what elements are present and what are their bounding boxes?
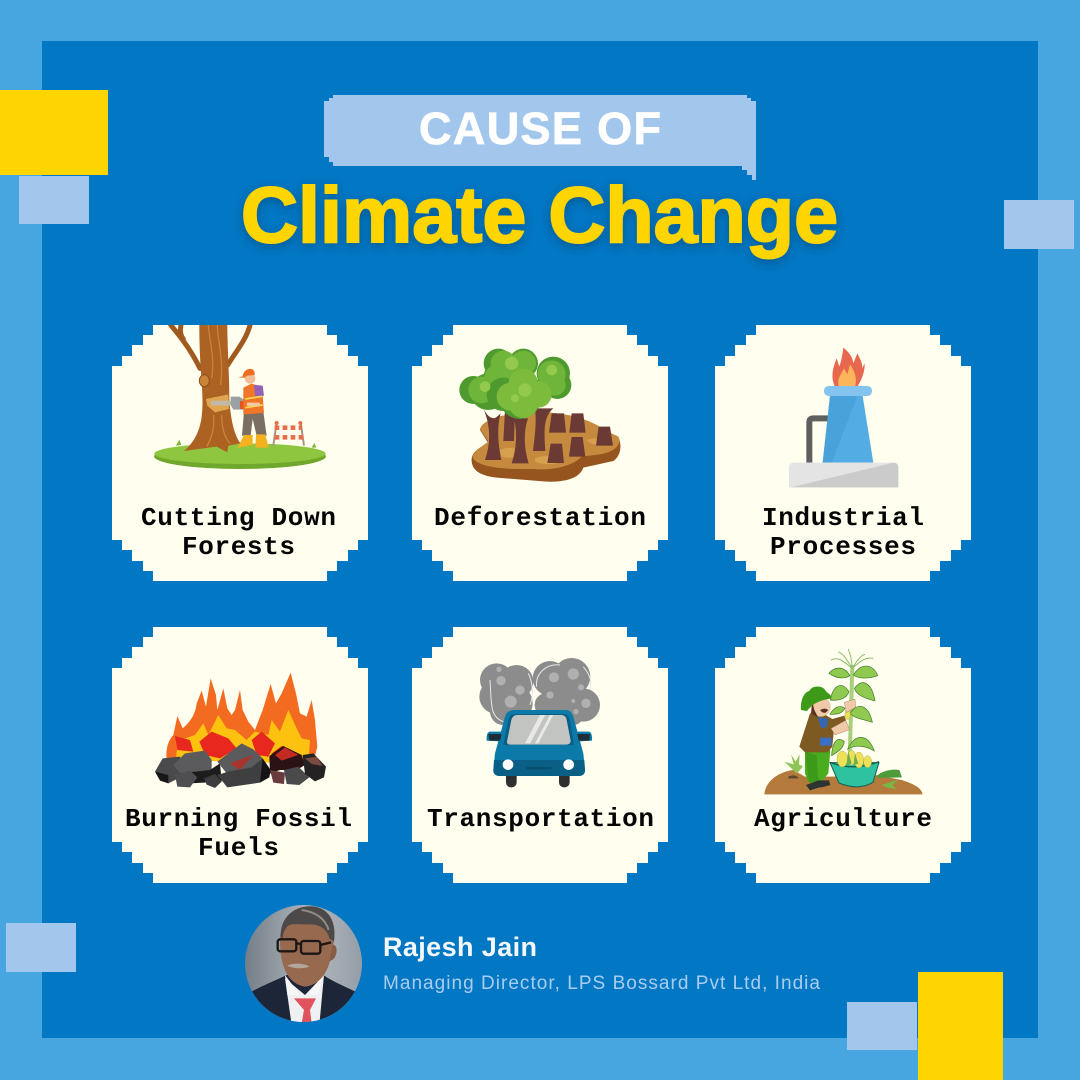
title: Climate Change xyxy=(241,170,838,259)
author role: Managing Director, LPS Bossard Pvt Ltd, India xyxy=(383,973,820,994)
label: Deforestation xyxy=(434,503,646,533)
label: Agriculture xyxy=(754,804,932,834)
icon: trees and stumps xyxy=(459,349,620,482)
label: Forests xyxy=(182,532,295,562)
panel: deforestation xyxy=(412,325,668,581)
decorative light block left xyxy=(19,176,89,224)
label xyxy=(125,804,352,863)
decorative light block bottom left xyxy=(6,923,76,972)
label: Burning Fossil xyxy=(125,804,352,834)
decorative yellow block top left xyxy=(0,90,108,175)
label xyxy=(762,503,924,562)
panel: burning fossil fuels xyxy=(112,627,368,883)
portrait: Rajesh Jain xyxy=(245,905,362,1022)
decorative yellow block bottom right xyxy=(918,972,1003,1080)
panel: industrial processes xyxy=(715,325,971,581)
icon: worker cutting tree xyxy=(154,325,326,469)
panel: cutting down forests xyxy=(112,325,368,581)
decorative light block bottom right xyxy=(847,1002,917,1050)
decorative light block right xyxy=(1004,200,1074,249)
label xyxy=(141,503,336,562)
icon: gas flare stack xyxy=(789,348,898,487)
icon: car with smoke xyxy=(479,658,600,787)
author name: Rajesh Jain xyxy=(383,932,537,962)
icon: farmer with corn xyxy=(764,649,923,794)
panel: agriculture xyxy=(715,627,971,883)
label: Fuels xyxy=(198,833,279,863)
label: Industrial xyxy=(762,503,924,533)
heading banner: cause of xyxy=(324,95,756,180)
label: Cutting Down xyxy=(141,503,336,533)
label: Processes xyxy=(770,532,916,562)
label: Transportation xyxy=(427,804,654,834)
heading banner: cause of: CAUSE OF xyxy=(419,103,661,154)
panel: transportation xyxy=(412,627,668,883)
icon: burning coal xyxy=(155,673,326,788)
